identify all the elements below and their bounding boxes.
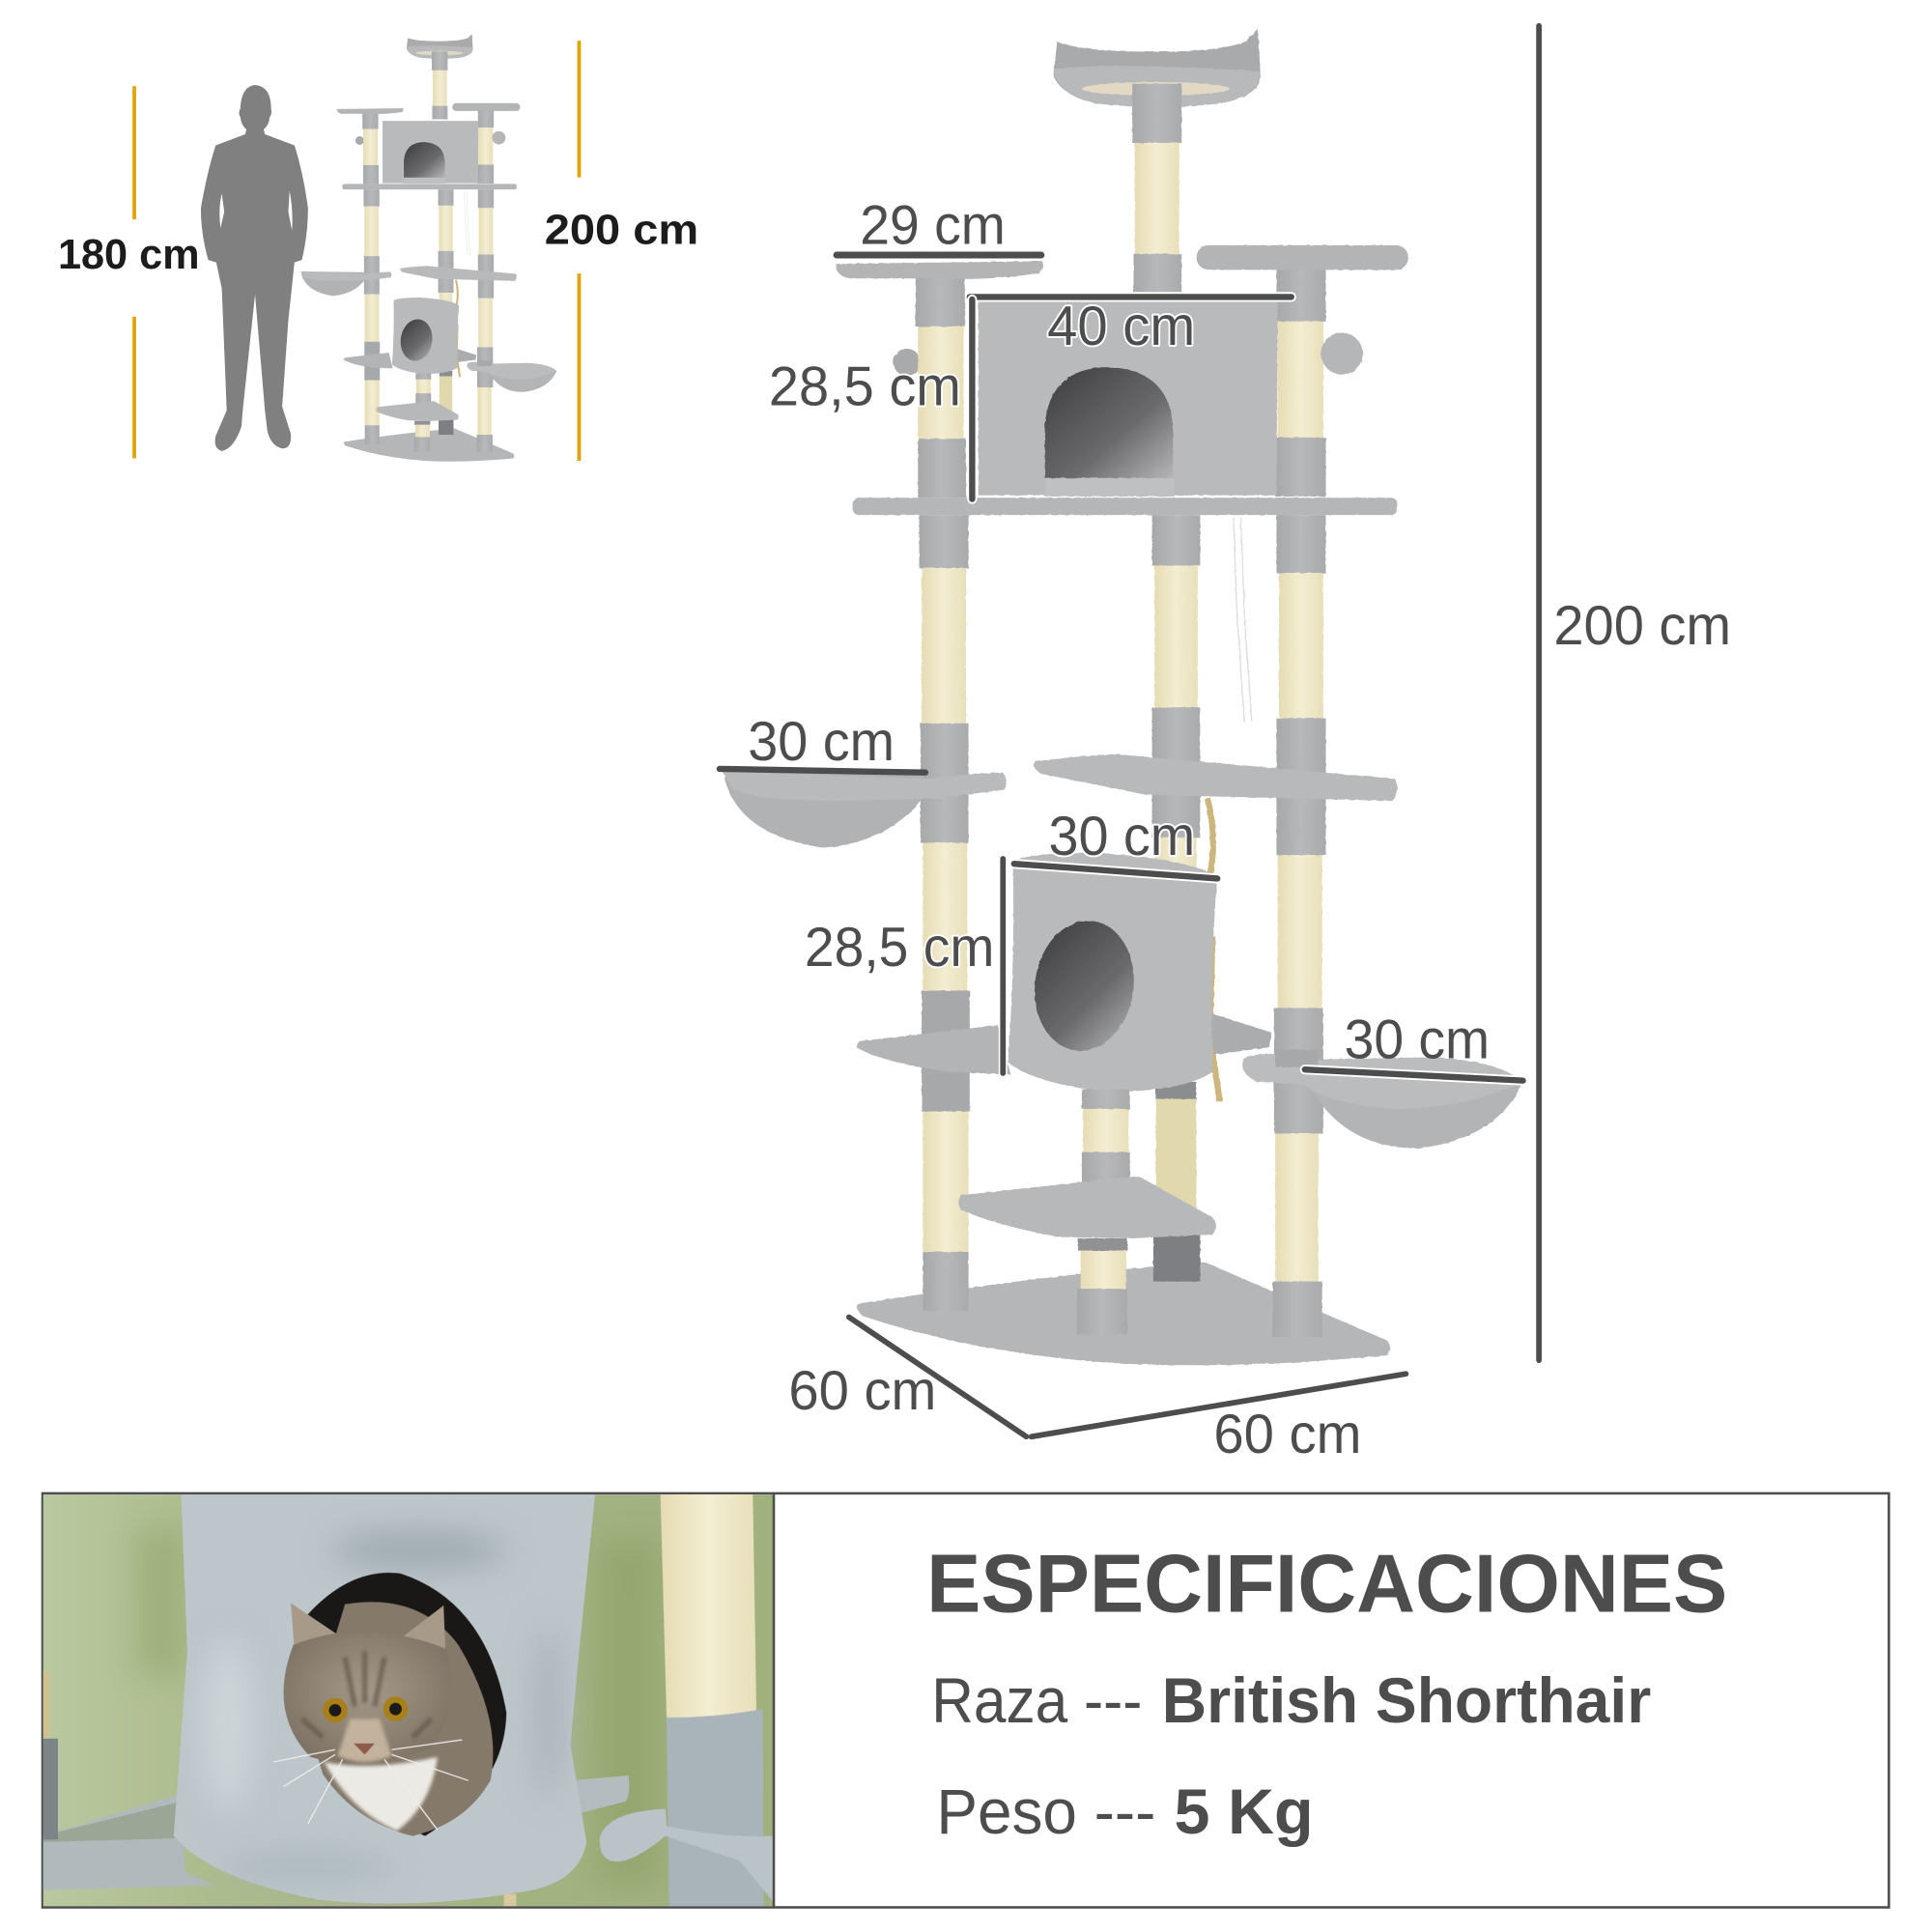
cat house: [174, 1494, 595, 1904]
dimension: upper house width: 40 cm: [1047, 296, 1195, 357]
left hammock: [722, 771, 1007, 848]
left lower post: [923, 1112, 969, 1311]
person height label: 180 cm: [58, 232, 200, 278]
left middle post: [920, 515, 970, 1112]
middle right shelf: [1034, 754, 1398, 801]
photo divider: [773, 1493, 775, 1907]
breed line: British Shorthair: [1162, 1665, 1651, 1737]
right upper disc: [1197, 245, 1408, 270]
dimension: lower house width: [1014, 806, 1217, 878]
cat eyes: [323, 1696, 408, 1722]
height dimension line: [1537, 26, 1541, 1360]
house opening: [296, 1573, 506, 1836]
base platform: [857, 1262, 1390, 1365]
dimension: upper house height: 28,5 cm: [769, 356, 961, 418]
weight line: [936, 1776, 1314, 1848]
specifications heading: ESPECIFICACIONES: [926, 1538, 1727, 1630]
height label: 200 cm: [1553, 595, 1731, 657]
yellow marker for 200 cm: [578, 41, 581, 461]
weight line: Peso ---: [936, 1776, 1155, 1848]
dimension: left hammock width: 30 cm: [748, 711, 895, 773]
breed line: Raza ---: [931, 1665, 1142, 1737]
upper shelf: [853, 497, 1397, 515]
grey post: [667, 1709, 764, 1906]
sisal post: [661, 1494, 756, 1718]
rope toy: [1208, 799, 1220, 1101]
fur shading: [203, 1530, 563, 1879]
man silhouette: [201, 85, 308, 451]
dimension: lower house height: 28,5 cm: [805, 917, 994, 979]
cat: [273, 1602, 493, 1836]
left post: [43, 1739, 58, 1839]
centre base post: [1077, 1238, 1127, 1334]
yellow marker for 180 cm: [133, 86, 136, 458]
dimension: right hammock width: 30 cm: [1345, 1009, 1490, 1071]
left upper disc: [836, 261, 1043, 279]
panel: specifications frame: [43, 1493, 1889, 1907]
cat ears: [291, 1604, 445, 1648]
right middle post: [1276, 515, 1325, 855]
top perch post: [1132, 84, 1181, 296]
photo: cat in the tree house: [43, 1494, 774, 1906]
right upper post: [1275, 265, 1363, 497]
cat tree product illustration: [722, 30, 1523, 1365]
top perch: [1054, 30, 1261, 121]
cat head: [284, 1632, 451, 1764]
breed line: [931, 1665, 1651, 1737]
small rear shelf: [576, 1776, 630, 1812]
dimension: base width: [1032, 1374, 1406, 1465]
dimension: right hammock width: [1305, 1009, 1523, 1081]
back centre post: [1152, 515, 1200, 1282]
upper house: [979, 300, 1278, 497]
cat nose: [354, 1744, 375, 1754]
right lower post: [1273, 855, 1323, 1337]
step shelf: [958, 1177, 1216, 1238]
thumbnail height label: 200 cm: [545, 208, 698, 254]
centre lower post: [1082, 1090, 1130, 1197]
white string toy: [1237, 518, 1248, 722]
dimension: base depth: 60 cm: [788, 1360, 936, 1422]
dimension: top disc width: 29 cm: [860, 195, 1006, 257]
cat muzzle: [337, 1719, 392, 1762]
dimension: base width: 60 cm: [1213, 1404, 1361, 1465]
rope end: [504, 1893, 516, 1906]
lower house: [1008, 853, 1217, 1092]
cat chest: [324, 1757, 438, 1831]
second level shelf: [856, 1012, 1271, 1074]
dimension: lower house width: 30 cm: [1048, 806, 1195, 867]
right hammock edge: [600, 1808, 774, 1902]
cat whiskers: [273, 1740, 469, 1830]
left shelf: [43, 1794, 215, 1890]
left upper post: [894, 273, 966, 497]
weight line: 5 Kg: [1175, 1776, 1314, 1848]
wall shadows: [135, 1528, 659, 1886]
dimension: base depth: [788, 1318, 1026, 1436]
thumbnail cat tree: [300, 34, 556, 462]
cat markings: [301, 1651, 431, 1737]
right hammock: [1242, 1050, 1523, 1149]
